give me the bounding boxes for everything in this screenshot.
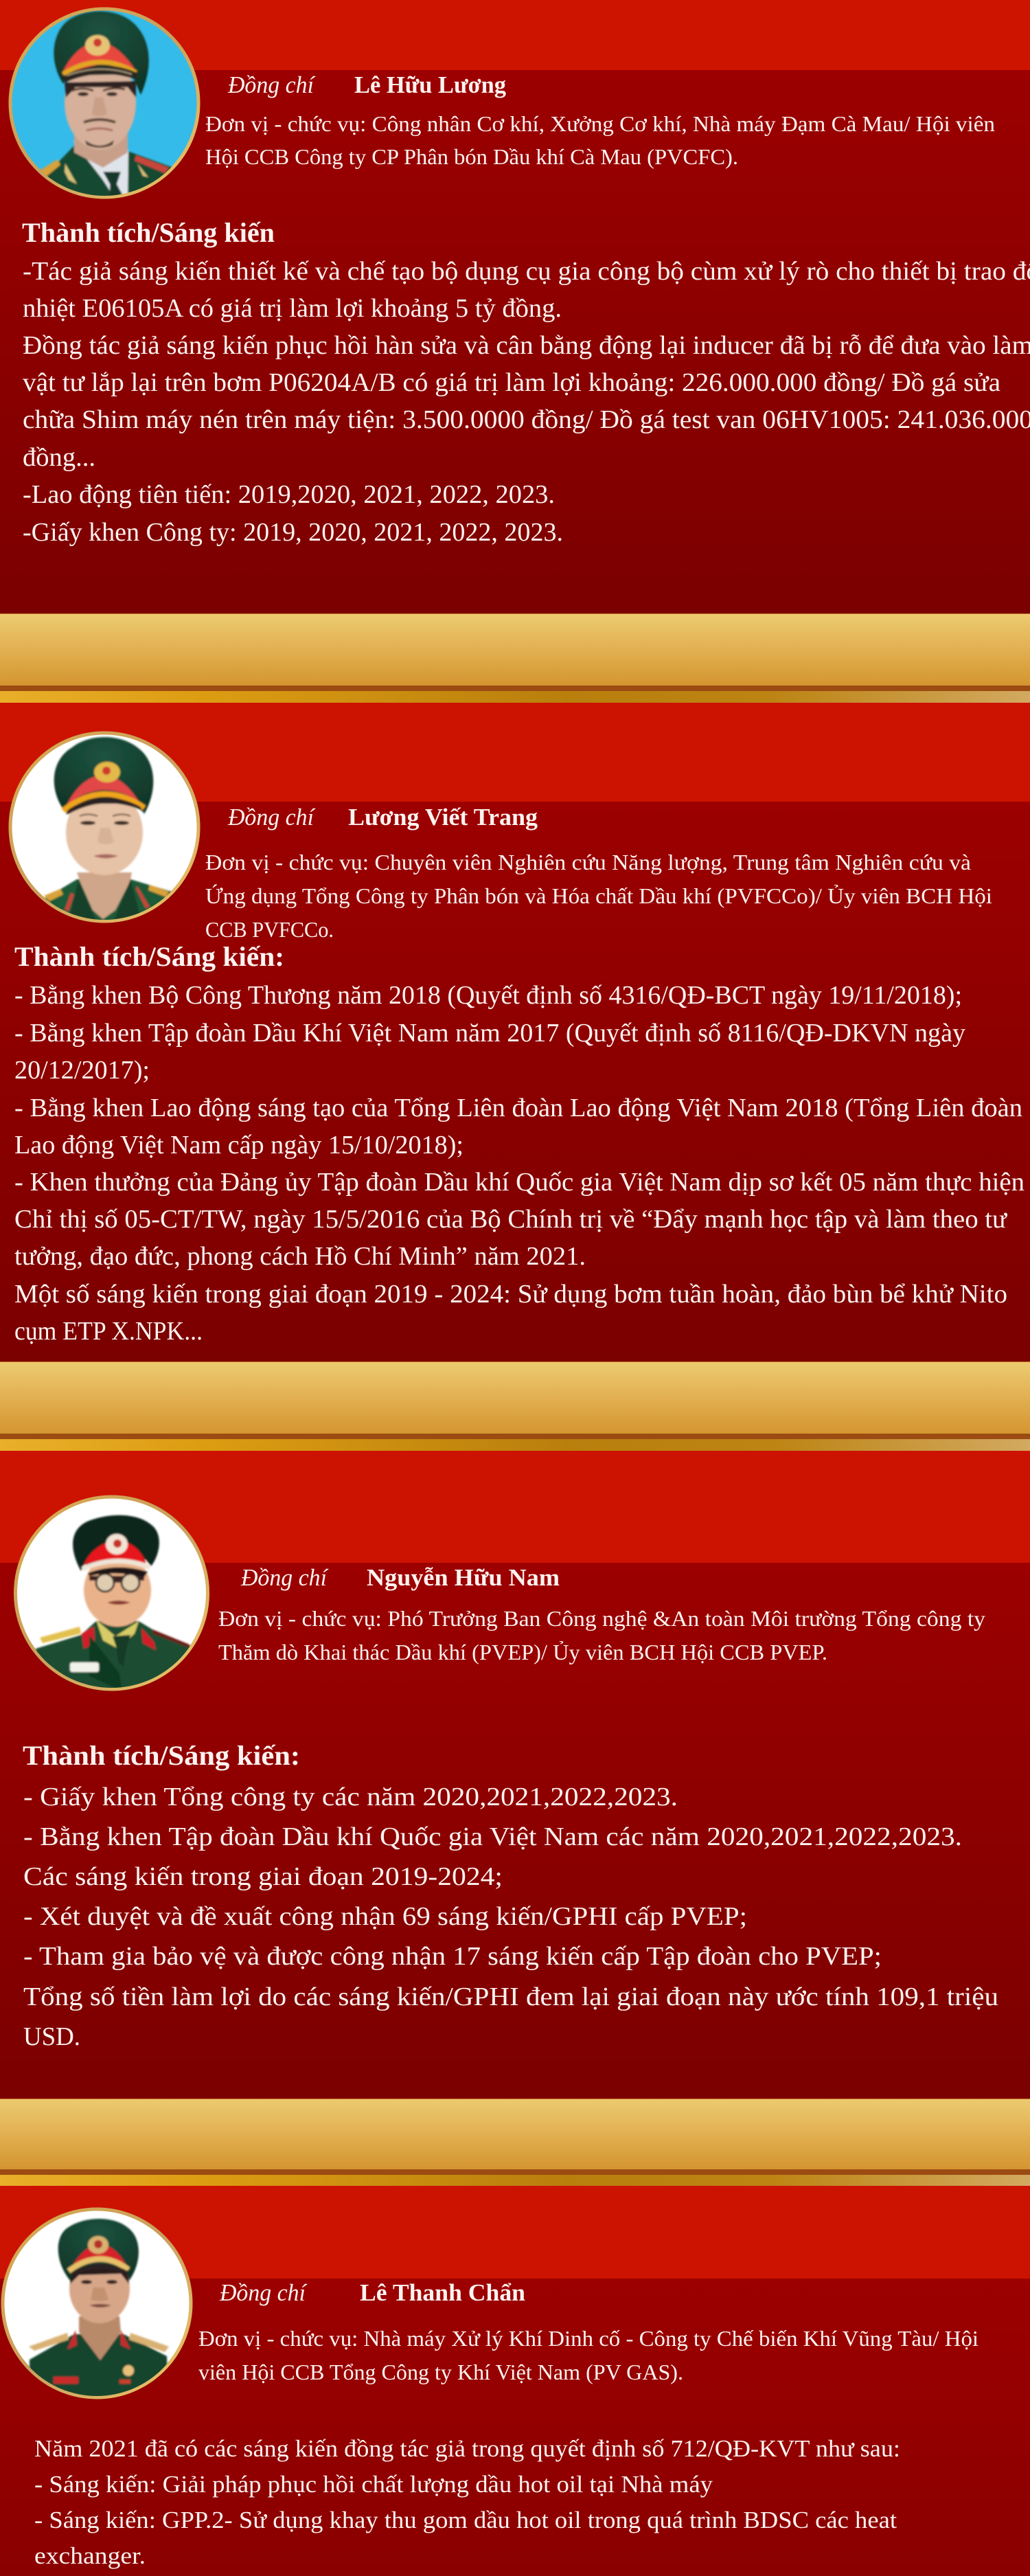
unit and position [198, 2326, 978, 2384]
name line: Đồng chí [227, 804, 316, 831]
dark red body [0, 70, 1030, 613]
name line: Đồng chí [240, 1564, 329, 1591]
achievements text [23, 257, 1030, 547]
name line [240, 1564, 560, 1591]
achievements text: Năm 2021 đã có các sáng kiến đồng tác giả trong quyết định số 712/QĐ-KVT như sau: [34, 2435, 900, 2462]
achievements text: - Tham gia bảo vệ và được công nhận 17 sáng kiến cấp Tập đoàn cho PVEP; [23, 1942, 882, 1971]
achievements text: chữa Shim máy nén trên máy tiện: 3.500.0000 đồng/ Đồ gá test van 06HV1005: 241.036.000 [23, 405, 1030, 434]
red header band [0, 703, 1030, 802]
achievements text: đồng... [23, 443, 95, 472]
name line: Lương Viết Trang [348, 804, 538, 831]
achievements text: nhiệt E06105A có giá trị làm lợi khoảng 5 tỷ đồng. [23, 294, 562, 323]
achievements text: -Lao động tiên tiến: 2019,2020, 2021, 2022, 2023. [23, 480, 555, 509]
dark red body [0, 802, 1030, 1362]
unit and position [218, 1606, 985, 1664]
achievements text [23, 1783, 998, 2051]
achievements text: - Sáng kiến: GPP.2- Sử dụng khay thu gom dầu hot oil trong quá trình BDSC các heat [34, 2507, 897, 2533]
achievements text: 20/12/2017); [14, 1056, 150, 1085]
panel: Lê Thanh Chẩn [0, 2186, 1030, 2576]
unit and position: Đơn vị - chức vụ: Công nhân Cơ khí, Xưởng Cơ khí, Nhà máy Đạm Cà Mau/ Hội viên [205, 111, 995, 136]
unit and position: Đơn vị - chức vụ: Chuyên viên Nghiên cứu Năng lượng, Trung tâm Nghiên cứu và [205, 850, 971, 874]
unit and position: Đơn vị - chức vụ: Phó Trưởng Ban Công nghệ &An toàn Môi trường Tổng công ty [218, 1606, 985, 1631]
achievements text: - Bằng khen Lao động sáng tạo của Tổng Liên đoàn Lao động Việt Nam 2018 (Tổng Liên đoàn [14, 1094, 1022, 1122]
unit and position: Ứng dụng Tổng Công ty Phân bón và Hóa chất Dầu khí (PVFCCo)/ Ủy viên BCH Hội [205, 883, 992, 908]
achievements text: - Bằng khen Bộ Công Thương năm 2018 (Quyết định số 4316/QĐ-BCT ngày 19/11/2018); [14, 981, 962, 1010]
name line: Đồng chí [227, 71, 316, 98]
achievements text [34, 2435, 900, 2569]
achievements text: Một số sáng kiến trong giai đoạn 2019 - 2024: Sử dụng bơm tuần hoàn, đảo bùn bể khử Nito [14, 1280, 1007, 1309]
gold divider [0, 1362, 1030, 1451]
achievements text: exchanger. [34, 2542, 146, 2569]
achievements text: - Sáng kiến: Giải pháp phục hồi chất lượng dầu hot oil tại Nhà máy [34, 2471, 713, 2498]
achievements heading: Thành tích/Sáng kiến: [23, 1740, 300, 1771]
name line: Đồng chí [219, 2279, 308, 2306]
achievements text: Lao động Việt Nam cấp ngày 15/10/2018); [14, 1131, 464, 1160]
achievements text: Đồng tác giả sáng kiến phục hồi hàn sửa và cân bằng động lại inducer đã bị rỗ để đưa vào làm [23, 331, 1030, 360]
dark red body [0, 2279, 1030, 2576]
portrait: Lê Hữu Lương [10, 9, 198, 206]
achievements text: - Bằng khen Tập đoàn Dầu Khí Việt Nam năm 2017 (Quyết định số 8116/QĐ-DKVN ngày [14, 1019, 965, 1048]
achievements heading: Thành tích/Sáng kiến [22, 217, 275, 248]
unit and position: Thăm dò Khai thác Dầu khí (PVEP)/ Ủy viên BCH Hội CCB PVEP. [218, 1640, 827, 1664]
unit and position [205, 850, 992, 942]
unit and position: viên Hội CCB Tổng Công ty Khí Việt Nam (PV GAS). [198, 2360, 683, 2384]
unit and position: CCB PVFCCo. [205, 917, 334, 942]
unit and position: Hội CCB Công ty CP Phân bón Dầu khí Cà Mau (PVCFC). [205, 144, 738, 169]
unit and position: Đơn vị - chức vụ: Nhà máy Xử lý Khí Dinh cố - Công ty Chế biến Khí Vũng Tàu/ Hội [198, 2326, 978, 2351]
gold divider [0, 613, 1030, 703]
achievements text: - Giấy khen Tổng công ty các năm 2020,2021,2022,2023. [23, 1783, 678, 1811]
achievements text: - Khen thưởng của Đảng ủy Tập đoàn Dầu khí Quốc gia Việt Nam dịp sơ kết 05 năm thực hiện [14, 1168, 1025, 1197]
gold divider [0, 2099, 1030, 2186]
achievements text: -Giấy khen Công ty: 2019, 2020, 2021, 2022, 2023. [23, 518, 563, 547]
portrait: Lê Thanh Chẩn [3, 2209, 191, 2404]
name line: Lê Thanh Chẩn [360, 2279, 525, 2306]
panel: Lê Hữu Lương [0, 0, 1030, 703]
achievements text [14, 981, 1025, 1346]
panel: Nguyễn Hữu Nam [0, 1451, 1030, 2186]
red header band [0, 1451, 1030, 1563]
achievements text: Các sáng kiến trong giai đoạn 2019-2024; [23, 1862, 503, 1891]
achievements heading: Thành tích/Sáng kiến: [14, 941, 284, 972]
achievements text: - Xét duyệt và đề xuất công nhận 69 sáng kiến/GPHI cấp PVEP; [23, 1902, 747, 1931]
name line [227, 71, 506, 98]
portrait: Lương Viết Trang [10, 733, 198, 927]
red header band [0, 0, 1030, 70]
achievements text: tưởng, đạo đức, phong cách Hồ Chí Minh” năm 2021. [14, 1242, 586, 1271]
unit and position [205, 111, 995, 169]
achievements text: - Bằng khen Tập đoàn Dầu khí Quốc gia Việt Nam các năm 2020,2021,2022,2023. [23, 1822, 962, 1851]
achievements text: USD. [23, 2022, 80, 2051]
name line: Nguyễn Hữu Nam [367, 1564, 560, 1591]
portrait: Nguyễn Hữu Nam [15, 1497, 207, 1697]
red header band [0, 2186, 1030, 2279]
achievements text: vật tư lắp lại trên bơm P06204A/B có giá trị làm lợi khoảng: 226.000.000 đồng/ Đồ gá sửa [23, 368, 1000, 397]
name line: Lê Hữu Lương [354, 71, 506, 98]
name line [219, 2279, 525, 2306]
achievements text: -Tác giả sáng kiến thiết kế và chế tạo bộ dụng cụ gia công bộ cùm xử lý rò cho thiết bị trao đổi [23, 257, 1030, 286]
achievements text: cụm ETP X.NPK... [14, 1317, 203, 1346]
dark red body [0, 1563, 1030, 2099]
achievements text: Tổng số tiền làm lợi do các sáng kiến/GPHI đem lại giai đoạn này ước tính 109,1 triệu [23, 1982, 998, 2011]
achievements text: Chỉ thị số 05-CT/TW, ngày 15/5/2016 của Bộ Chính trị về “Đẩy mạnh học tập và làm theo tư [14, 1205, 1007, 1234]
name line [227, 804, 538, 831]
panel: Lương Viết Trang [0, 703, 1030, 1451]
